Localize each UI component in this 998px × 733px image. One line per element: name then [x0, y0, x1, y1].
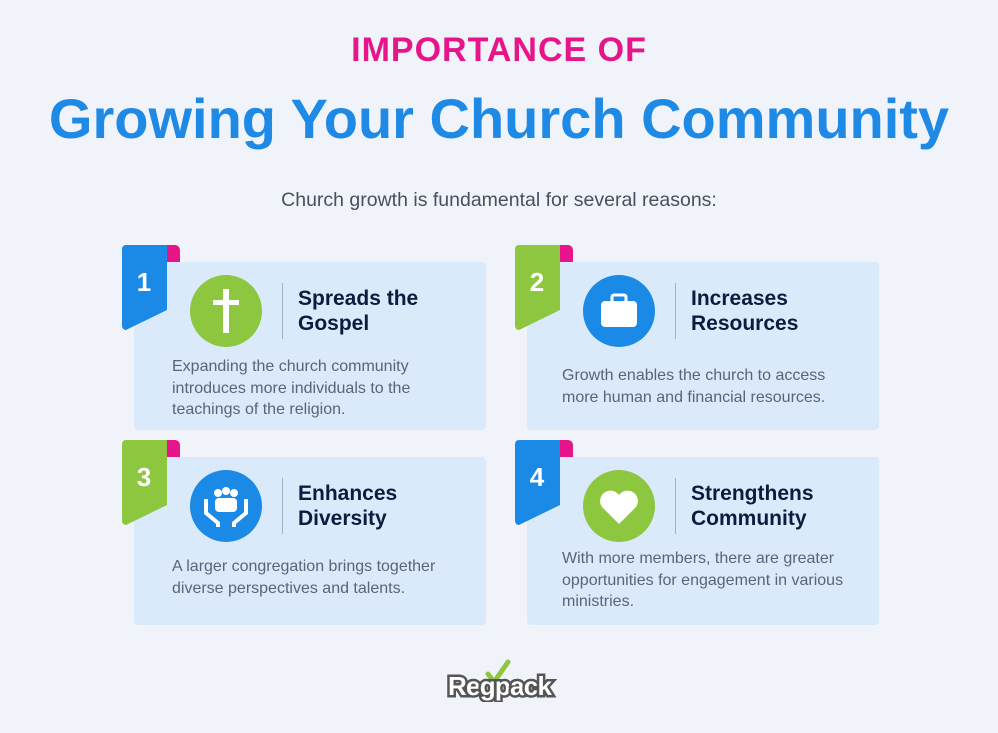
- heading 4: Strengthens: [691, 482, 814, 505]
- ribbon 2: [515, 245, 573, 330]
- text 3: [172, 558, 436, 596]
- heading 3: Enhances: [298, 482, 397, 505]
- panel: card 4: [515, 440, 879, 625]
- heading 1: Spreads the: [298, 287, 418, 310]
- logo: Regpack: Regpack: [448, 671, 553, 701]
- text 1: teachings of the religion.: [172, 401, 345, 418]
- text 2: [562, 367, 825, 406]
- text 4: ministries.: [562, 593, 634, 610]
- icon: briefcase: [583, 275, 655, 347]
- ribbon 3: 3: [137, 462, 151, 492]
- text 1: introduces more individuals to the: [172, 380, 410, 396]
- icon: heart: [583, 470, 655, 542]
- heading 1: Gospel: [298, 312, 369, 335]
- heading 4: [691, 482, 814, 530]
- heading 2: Resources: [691, 312, 798, 335]
- subtitle: Church growth is fundamental for several reasons:: [281, 189, 717, 211]
- ribbon 2: 2: [530, 267, 544, 297]
- panel: card 3: [122, 440, 486, 625]
- text 2: more human and financial resources.: [562, 388, 825, 406]
- icon: people in hands: [190, 470, 262, 542]
- panel: card 2: [515, 245, 879, 430]
- text 1: Expanding the church community: [172, 358, 409, 375]
- text 3: diverse perspectives and talents.: [172, 580, 405, 596]
- title: importance of: IMPORTANCE OF: [351, 31, 647, 69]
- text 4: With more members, there are greater: [562, 550, 834, 567]
- text 3: A larger congregation brings together: [172, 558, 435, 575]
- panel: card 1: [122, 245, 486, 430]
- icon: cross: [190, 275, 262, 347]
- text 4: opportunities for engagement in various: [562, 572, 843, 588]
- heading 1: [298, 287, 418, 335]
- ribbon 3: [122, 440, 180, 525]
- heading 3: Diversity: [298, 507, 387, 530]
- ribbon 4: 4: [530, 462, 545, 492]
- title: main heading: Growing Your Church Community: [49, 87, 949, 150]
- ribbon 1: [122, 245, 180, 330]
- ribbon 4: [515, 440, 573, 525]
- text 2: Growth enables the church to access: [562, 367, 825, 384]
- logo: Regpack: [447, 660, 558, 702]
- heading 3: [298, 482, 397, 530]
- heading 4: Community: [691, 507, 806, 530]
- ribbon 1: 1: [137, 267, 151, 297]
- text 4: [562, 550, 843, 610]
- text 1: [172, 358, 410, 418]
- heading 2: [691, 287, 798, 335]
- heading 2: Increases: [691, 287, 788, 310]
